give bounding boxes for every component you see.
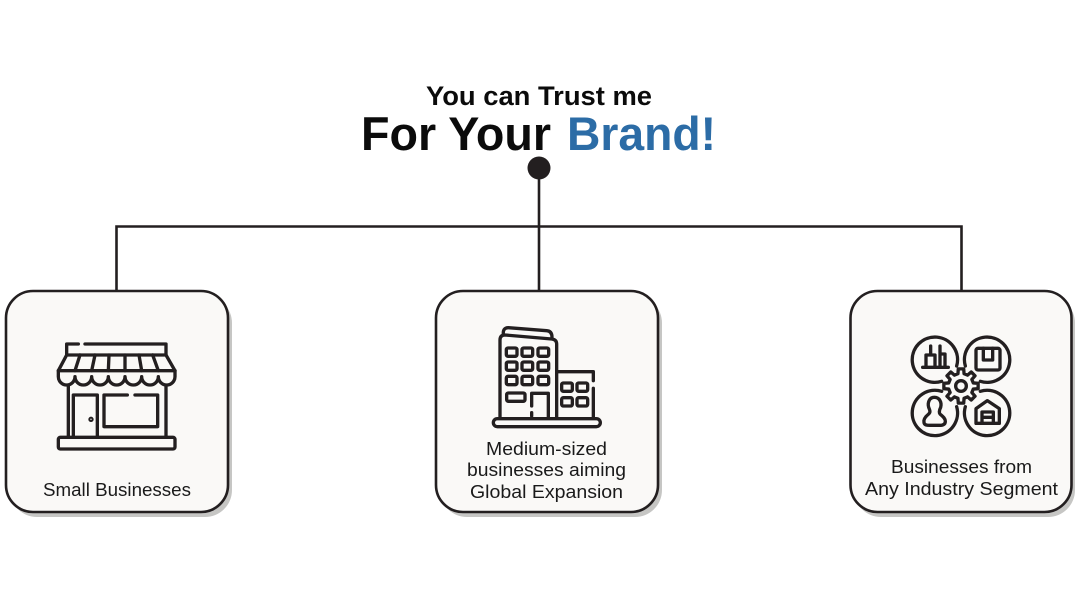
label	[467, 438, 626, 502]
title line 1: You can Trust me	[426, 81, 652, 111]
label: Global Expansion	[470, 481, 623, 502]
panel: any industry segment	[850, 291, 1075, 517]
icon: storefront	[58, 344, 175, 449]
title line 2 blue: Brand!	[567, 107, 716, 160]
title line 2 black: For Your	[361, 107, 551, 160]
label: Medium-sized	[486, 438, 607, 459]
label	[865, 456, 1058, 499]
title	[361, 81, 716, 160]
label: Any Industry Segment	[865, 478, 1058, 499]
panel: medium-sized businesses	[436, 291, 662, 517]
label: Businesses from	[891, 456, 1032, 477]
connector dot	[528, 156, 550, 180]
label: Small Businesses	[43, 479, 191, 500]
panel: small businesses	[6, 291, 232, 517]
connector lines	[116, 168, 962, 291]
label: businesses aiming	[467, 459, 626, 480]
icon: industry segments with gear	[912, 337, 1010, 436]
icon: office buildings	[493, 328, 600, 427]
